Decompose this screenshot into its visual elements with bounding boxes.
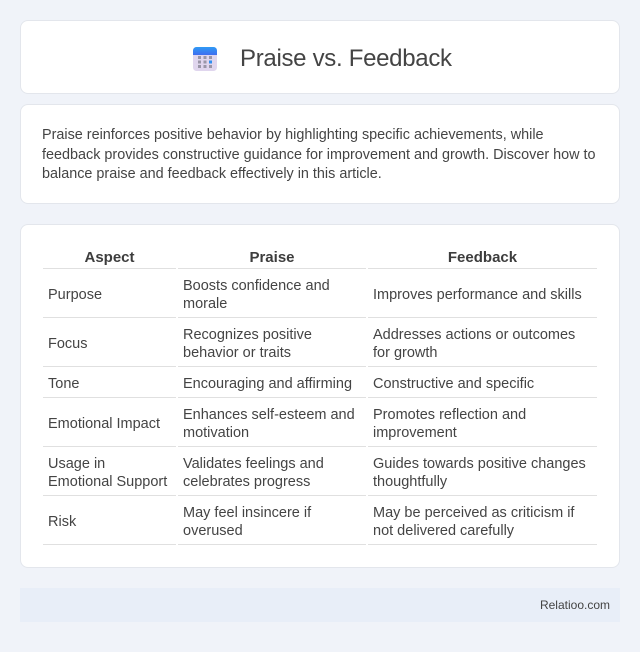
table panel bbox=[20, 224, 620, 568]
Focus: Praise: behavior or traits bbox=[183, 345, 291, 361]
Usage: Feedback: thoughtfully bbox=[373, 474, 447, 490]
Tone: Feedback: Constructive and specific bbox=[373, 376, 534, 392]
Emotional Impact: Praise: Enhances self-esteem and bbox=[183, 407, 355, 423]
footer bar bbox=[20, 588, 620, 622]
Emotional Impact: Praise bbox=[183, 407, 355, 441]
intro text panel bbox=[20, 104, 620, 204]
Purpose: Feedback: Improves performance and skills bbox=[373, 287, 582, 303]
intro paragraph bbox=[42, 127, 596, 182]
row: Emotional Impact: Emotional Impact bbox=[48, 416, 160, 432]
Focus: Praise: Recognizes positive bbox=[183, 327, 312, 343]
Focus: Feedback bbox=[373, 327, 575, 361]
Purpose: Praise: morale bbox=[183, 296, 227, 312]
header panel bbox=[20, 20, 620, 94]
Usage: Feedback: Guides towards positive changes bbox=[373, 456, 586, 472]
Usage: Praise: celebrates progress bbox=[183, 474, 310, 490]
icon: calendar bbox=[193, 47, 217, 71]
intro paragraph: feedback provides constructive guidance for improvement and growth. Discover how to bbox=[42, 147, 596, 163]
Risk: Feedback: not delivered carefully bbox=[373, 523, 514, 539]
Risk: Praise: May feel insincere if bbox=[183, 505, 311, 521]
Risk: Feedback bbox=[373, 505, 574, 539]
Purpose: Praise bbox=[183, 278, 330, 312]
column heading: Feedback: Feedback bbox=[448, 249, 517, 266]
title: Praise vs. Feedback bbox=[240, 45, 452, 72]
Focus: Feedback: Addresses actions or outcomes bbox=[373, 327, 575, 343]
Emotional Impact: Praise: motivation bbox=[183, 425, 249, 441]
row: Tone: Tone bbox=[48, 376, 79, 392]
Usage: Praise: Validates feelings and bbox=[183, 456, 324, 472]
Focus: Praise bbox=[183, 327, 312, 361]
intro paragraph: Praise reinforces positive behavior by highlighting specific achievements, while bbox=[42, 127, 544, 143]
row: Usage in Emotional Support: Emotional Support bbox=[48, 474, 167, 490]
Purpose: Praise: Boosts confidence and bbox=[183, 278, 330, 294]
column heading: Praise: Praise bbox=[249, 249, 295, 266]
Risk: Praise: overused bbox=[183, 523, 243, 539]
footer text: Relatioo.com bbox=[540, 598, 610, 612]
row: Risk: Risk bbox=[48, 514, 76, 530]
Emotional Impact: Feedback bbox=[373, 407, 526, 441]
Usage: Feedback bbox=[373, 456, 586, 490]
Usage: Praise bbox=[183, 456, 324, 490]
Focus: Feedback: for growth bbox=[373, 345, 437, 361]
row: Focus: Focus bbox=[48, 336, 88, 352]
row: Usage in Emotional Support: Usage in bbox=[48, 456, 105, 472]
Risk: Feedback: May be perceived as criticism if bbox=[373, 505, 574, 521]
column heading: Aspect: Aspect bbox=[84, 249, 135, 266]
row: Usage in Emotional Support bbox=[48, 456, 168, 490]
Tone: Praise: Encouraging and affirming bbox=[183, 376, 352, 392]
Emotional Impact: Feedback: Promotes reflection and bbox=[373, 407, 526, 423]
intro paragraph: balance praise and feedback effectively in this article. bbox=[42, 166, 382, 182]
Emotional Impact: Feedback: improvement bbox=[373, 425, 457, 441]
Risk: Praise bbox=[183, 505, 312, 539]
row: Purpose: Purpose bbox=[48, 287, 102, 303]
